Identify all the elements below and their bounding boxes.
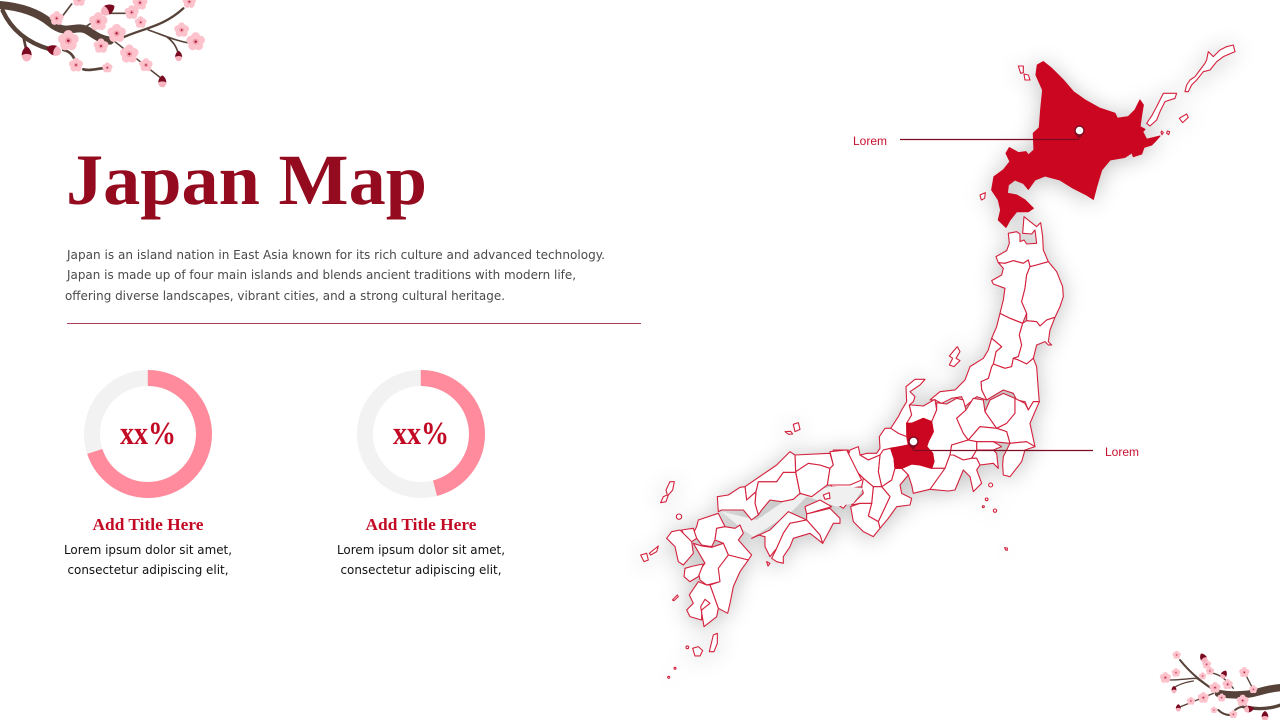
donut chart 2: [365, 378, 477, 490]
description text: offering diverse landscapes, vibrant cities, and a strong cultural heritage.: [65, 288, 505, 303]
Chugoku, Shikoku and Kyushu regions: [641, 450, 863, 678]
caption 1: Lorem ipsum dolor sit amet,: [64, 542, 232, 557]
callout: Hokkaido: [853, 126, 1084, 148]
caption 2: consectetur adipiscing elit,: [340, 562, 502, 577]
title: Japan Map: [66, 140, 427, 220]
description text: Japan is made up of four main islands and blends ancient traditions with modern life,: [66, 267, 576, 282]
caption 1: consectetur adipiscing elit,: [68, 562, 228, 577]
label: Lorem: [1105, 445, 1139, 459]
stat block 2: [337, 378, 505, 577]
decoration: cherry branch top left: [0, 0, 205, 87]
description text: Japan is an island nation in East Asia known for its rich culture and advanced technology.: [66, 247, 605, 262]
label: Lorem: [853, 134, 887, 148]
decoration: cherry branch bottom right: [1160, 651, 1280, 720]
Tohoku region: [930, 217, 1063, 410]
donut chart 1: [92, 378, 204, 490]
description text: [65, 247, 605, 303]
value 1: xx%: [120, 416, 176, 452]
callout: Gifu: [908, 437, 1139, 459]
caption 2: [337, 542, 505, 577]
heading 1: Add Title Here: [92, 515, 204, 534]
heading 2: Add Title Here: [366, 515, 477, 534]
caption 1: [64, 542, 232, 577]
map pin: [908, 437, 918, 450]
stat block 1: [64, 378, 232, 577]
Chubu, Kanto and Kansai regions: [785, 379, 1039, 550]
caption 2: Lorem ipsum dolor sit amet,: [337, 542, 505, 557]
map pin: [1074, 126, 1084, 139]
map of Japan: [641, 45, 1235, 678]
Hokkaido and northern islands: [980, 45, 1235, 227]
value 2: xx%: [393, 416, 449, 452]
